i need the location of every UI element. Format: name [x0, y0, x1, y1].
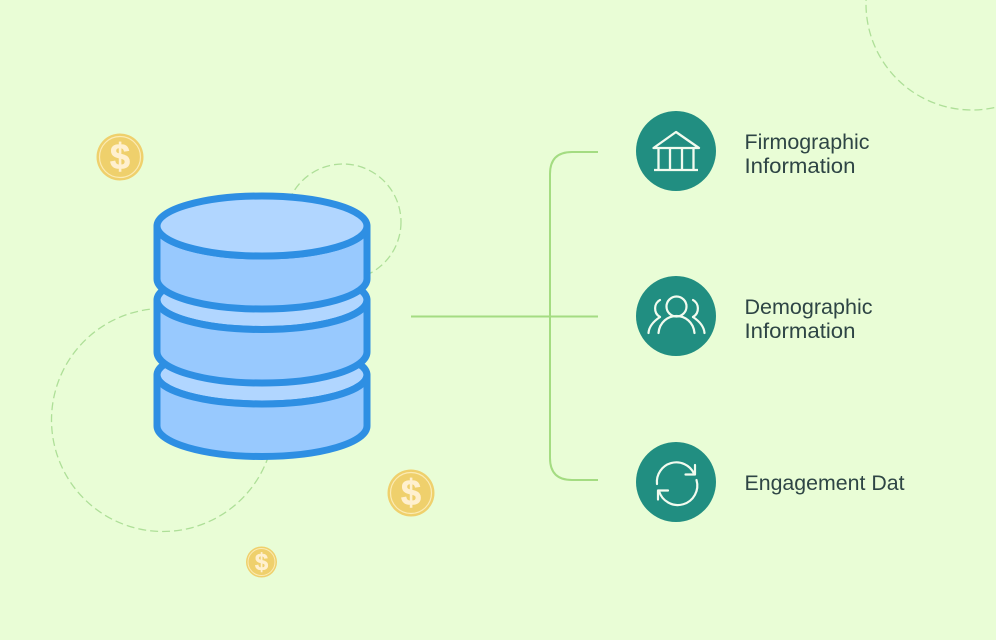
coin bottom: $: [255, 549, 269, 576]
label: engagement data: Engagement Dat: [744, 472, 905, 495]
connector bracket: [411, 152, 598, 480]
bottom disk: [157, 346, 367, 456]
item: engagement data: [636, 442, 905, 522]
coin right: $: [401, 472, 421, 513]
icon: bank building: [636, 111, 716, 191]
label: demographic: Information: [744, 320, 856, 343]
database cylinder icon: [157, 196, 367, 456]
top disk: [157, 196, 367, 309]
coin bottom: [246, 546, 277, 578]
label: demographic: Demographic: [744, 296, 872, 319]
coin top left: $: [110, 136, 130, 177]
item: firmographic information: [636, 111, 870, 191]
item: demographic information: [636, 276, 872, 356]
icon: refresh arrows: [636, 442, 716, 522]
coin right: [388, 470, 434, 516]
icon: people group: [636, 276, 716, 356]
middle disk: [157, 270, 367, 383]
label: firmographic: Information: [744, 155, 856, 178]
label: firmographic: Firmographic: [744, 131, 870, 154]
coin top left: [96, 134, 144, 180]
